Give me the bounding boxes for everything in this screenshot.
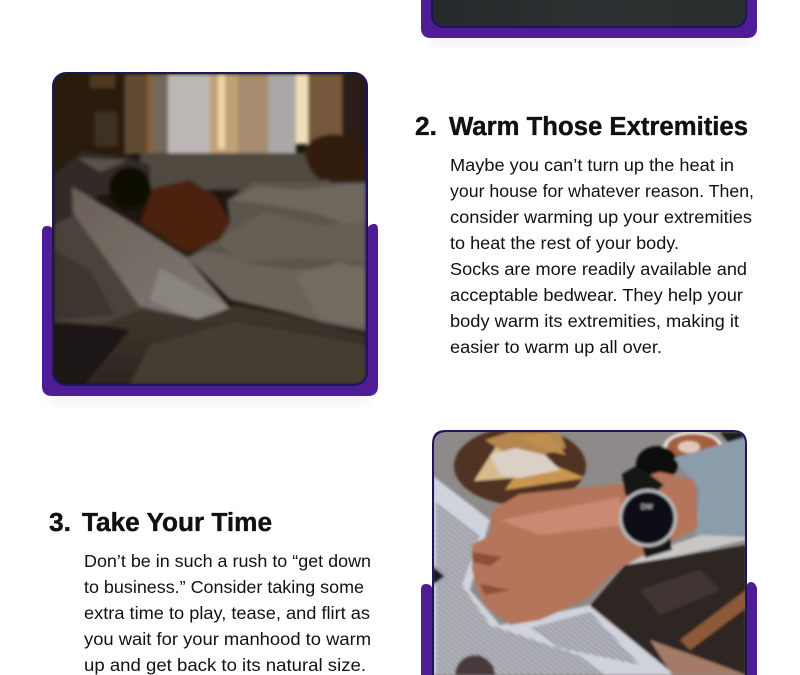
coaster on newspaper [455, 655, 495, 675]
panel: top image card [421, 0, 757, 44]
text block: section 2 body [450, 155, 754, 357]
photo: top card [431, 0, 747, 28]
purple backing: top card [421, 0, 757, 38]
heading: 2. Warm Those Extremities: Warm Those Extremities [449, 113, 748, 141]
heading: 3. Take Your Time: 3. [49, 509, 71, 537]
text block: section 3 body: Don’t be in such a rush to “get down [84, 551, 371, 571]
purple backing: watch card [421, 582, 757, 675]
text block: section 2 body: to heat the rest of your body. [450, 233, 679, 253]
text block: section 2 body: consider warming up your extremities [450, 207, 752, 227]
photo frame: watch card [432, 430, 747, 675]
photo frame: bedroom card [52, 72, 368, 386]
text block: section 3 body: extra time to play, tease, and flirt as [84, 603, 370, 623]
text block: section 2 body: easier to warm up all over. [450, 337, 662, 357]
photo: couple sleeping in bed [54, 74, 366, 384]
purple backing: bedroom card [42, 224, 378, 396]
text block: section 3 body: up and get back to its natural size. [84, 655, 366, 675]
panel: bedroom image card [42, 72, 378, 403]
text block: section 2 body: body warm its extremities, making it [450, 311, 739, 331]
text block: section 3 body [84, 551, 371, 675]
panel: watch image card [421, 427, 757, 675]
text block: section 2 body: acceptable bedwear. They help your [450, 285, 743, 305]
text block: section 2 body: Socks are more readily available and [450, 259, 747, 279]
text block: section 3 body: to business.” Consider taking some [84, 577, 364, 597]
text block: section 3 body: you wait for your manhood to warm [84, 629, 371, 649]
heading: 3. Take Your Time: Take Your Time [82, 509, 272, 537]
text block: section 2 body: your house for whatever reason. Then, [450, 181, 754, 201]
photo: wristwatch, food and newspaper [433, 427, 746, 675]
text block: section 2 body: Maybe you can’t turn up the heat in [450, 155, 734, 175]
photo: wristwatch, food and newspaper: DW [641, 504, 653, 511]
heading: 2. Warm Those Extremities: 2. [415, 113, 437, 141]
